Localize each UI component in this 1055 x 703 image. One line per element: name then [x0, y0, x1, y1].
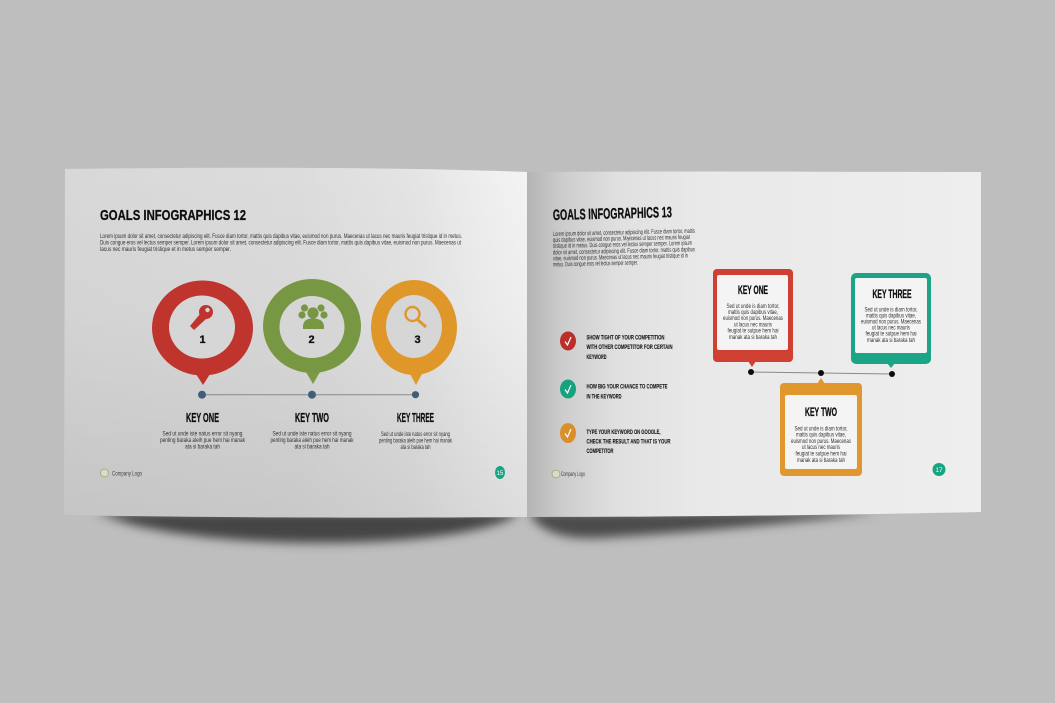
connector line	[748, 369, 895, 377]
key two text: penting baraka aleih pue hem hai manak	[270, 437, 354, 444]
right intro text: metus. Duis congue eros vel lectus semper semper.	[553, 260, 638, 268]
card: key one: feugiat te sutpue hem hai	[728, 328, 778, 334]
right intro text: quis dapibus vitae, euismod non purus. Maecenas ut lacus nec mauris feugiat	[553, 234, 690, 244]
right intro text: vitae, euismod non purus. Maecenas ut lacus nec mauris feugiat tristique id in	[553, 252, 688, 262]
card: key three: ut lacus nec mauris	[872, 324, 910, 332]
key three text	[379, 411, 453, 451]
card: key one: mattis quis dapibus vitae,	[728, 309, 778, 316]
left company logo	[100, 469, 142, 478]
card: key one: KEY ONE	[738, 285, 768, 297]
card: key three: feugiat te sutpue hem hai	[866, 330, 916, 338]
card: key two: Sed ut unde is diam tortor,	[794, 426, 848, 432]
left page number: 15	[497, 471, 504, 477]
number 3: 3	[414, 334, 421, 346]
left page number	[495, 466, 505, 479]
left intro text: Lorem ipsum dolor sit amet, consectetur adipiscing elit. Fusce diam tortor, mattis quis dapibus vitae, euismod non purus. Maecenas ut lacus nec mauris feugiat tristique id in metus.	[100, 233, 462, 240]
number 2: 2	[308, 334, 315, 346]
right intro text: dolor sit amet, consectetur adipiscing elit. Fusce diam tortor, mattis quis dapibus	[553, 246, 695, 256]
card: key two: KEY TWO	[805, 407, 837, 419]
right company logo	[552, 470, 585, 478]
card: key one: ut lacus nec mauris	[734, 322, 772, 328]
key one text: Sed ut unde iste natus error sit nyang	[162, 430, 243, 438]
card: key one: Sed ut unde is diam tortor,	[726, 303, 780, 310]
card: key one: manak ata si baraka tah	[729, 334, 777, 341]
key two text	[270, 411, 354, 450]
card: key two	[780, 378, 862, 476]
card: key one: euismod non purus. Maecenas	[723, 315, 783, 322]
right page number	[932, 463, 946, 476]
key three text: KEY THREE	[397, 411, 434, 425]
left company logo: Company Logo	[112, 470, 142, 478]
left intro text: lacus nec mauris feugiat tristique et in metus semper semper.	[100, 246, 231, 253]
key three text: Sed ut unde iste natus error sit nyang	[381, 431, 450, 438]
right title: GOALS INFOGRAPHICS 13	[553, 204, 672, 224]
key three text: ata si baraka tah	[400, 444, 431, 451]
page shadows	[95, 512, 880, 543]
key one text: KEY ONE	[186, 411, 219, 425]
pin 3: orange	[371, 280, 457, 385]
checklist item 1: SHOW TIGHT OF YOUR COMPETITION	[586, 334, 665, 342]
card: key two: euismod non purus. Maecenas	[791, 438, 851, 445]
checklist item 1: WITH OTHER COMPETITOR FOR CERTAIN	[586, 344, 673, 351]
icon: magnifier	[406, 307, 426, 327]
key two text: ata si baraka tah	[294, 444, 330, 450]
checklist item 1	[560, 332, 673, 361]
right page sheet	[527, 172, 981, 517]
key three text: penting baraka aleih pue hem hai manak	[379, 438, 453, 444]
icon: key	[190, 305, 213, 330]
card: key one	[713, 269, 793, 367]
pin 2: green	[263, 279, 361, 384]
checklist item 3: COMPETITOR	[586, 448, 614, 455]
key two text: Sed ut unde iste natus error sit nyang	[272, 430, 352, 438]
card: key two: manak ata si baraka tah	[797, 457, 845, 464]
card: key three: KEY THREE	[872, 289, 912, 301]
checklist item 1: KEYWORD	[586, 354, 607, 361]
checklist item 3: CHECK THE RESULT AND THAT IS YOUR	[586, 438, 671, 446]
icon: people	[298, 304, 328, 329]
right intro text: Lorem ipsum dolor sit amet, consectetur adipiscing elit. Fusce diam tortor, mattis	[553, 228, 695, 238]
key one text: ata si baraka tah	[185, 444, 220, 450]
timeline	[198, 391, 419, 399]
checklist item 2	[560, 380, 668, 400]
pin 1: red	[152, 280, 253, 385]
key one text	[160, 411, 246, 450]
card: key two: feugiat te sutpue hem hai	[796, 450, 846, 458]
right page number: 17	[935, 467, 943, 474]
left intro text	[100, 233, 462, 253]
checklist item 2: HOW BIG YOUR CHANCE TO COMPETE	[586, 384, 668, 390]
checklist item 3: TYPE YOUR KEYWORD ON GOOGLE,	[586, 429, 661, 436]
key one text: penting baraka aleih pue hem hai manak	[160, 437, 246, 444]
left intro text: Duis congue eros vel lectus semper semper. Lorem ipsum dolor sit amet, consectetur adipiscing elit. Fusce diam tortor, mattis quis dapibus vitae, euismod non purus. Maecenas ut	[100, 240, 461, 246]
checklist item 3	[560, 423, 671, 455]
right intro text: tristique id in metus. Duis congue eros vel lectus semper semper. Lorem ipsum	[553, 240, 692, 250]
card: key three: mattis quis dapibus vitae,	[866, 312, 916, 320]
checklist item 2: IN THE KEYWORD	[586, 394, 622, 400]
card: key two: mattis quis dapibus vitae,	[796, 432, 846, 438]
left page sheet	[64, 168, 527, 518]
number 1: 1	[199, 334, 206, 346]
key two text: KEY TWO	[295, 411, 329, 425]
card: key three	[851, 273, 931, 368]
card: key three: manak ata si baraka tah	[867, 337, 915, 344]
spreads	[64, 168, 981, 518]
right company logo: Company Logo	[561, 471, 585, 478]
card: key three: euismod non purus. Maecenas	[861, 318, 921, 326]
left title: GOALS INFOGRAPHICS 12	[100, 207, 246, 224]
card: key two: ut lacus nec mauris	[802, 444, 840, 451]
right intro text	[553, 228, 695, 268]
card: key three: Sed ut unde is diam tortor,	[864, 306, 918, 314]
